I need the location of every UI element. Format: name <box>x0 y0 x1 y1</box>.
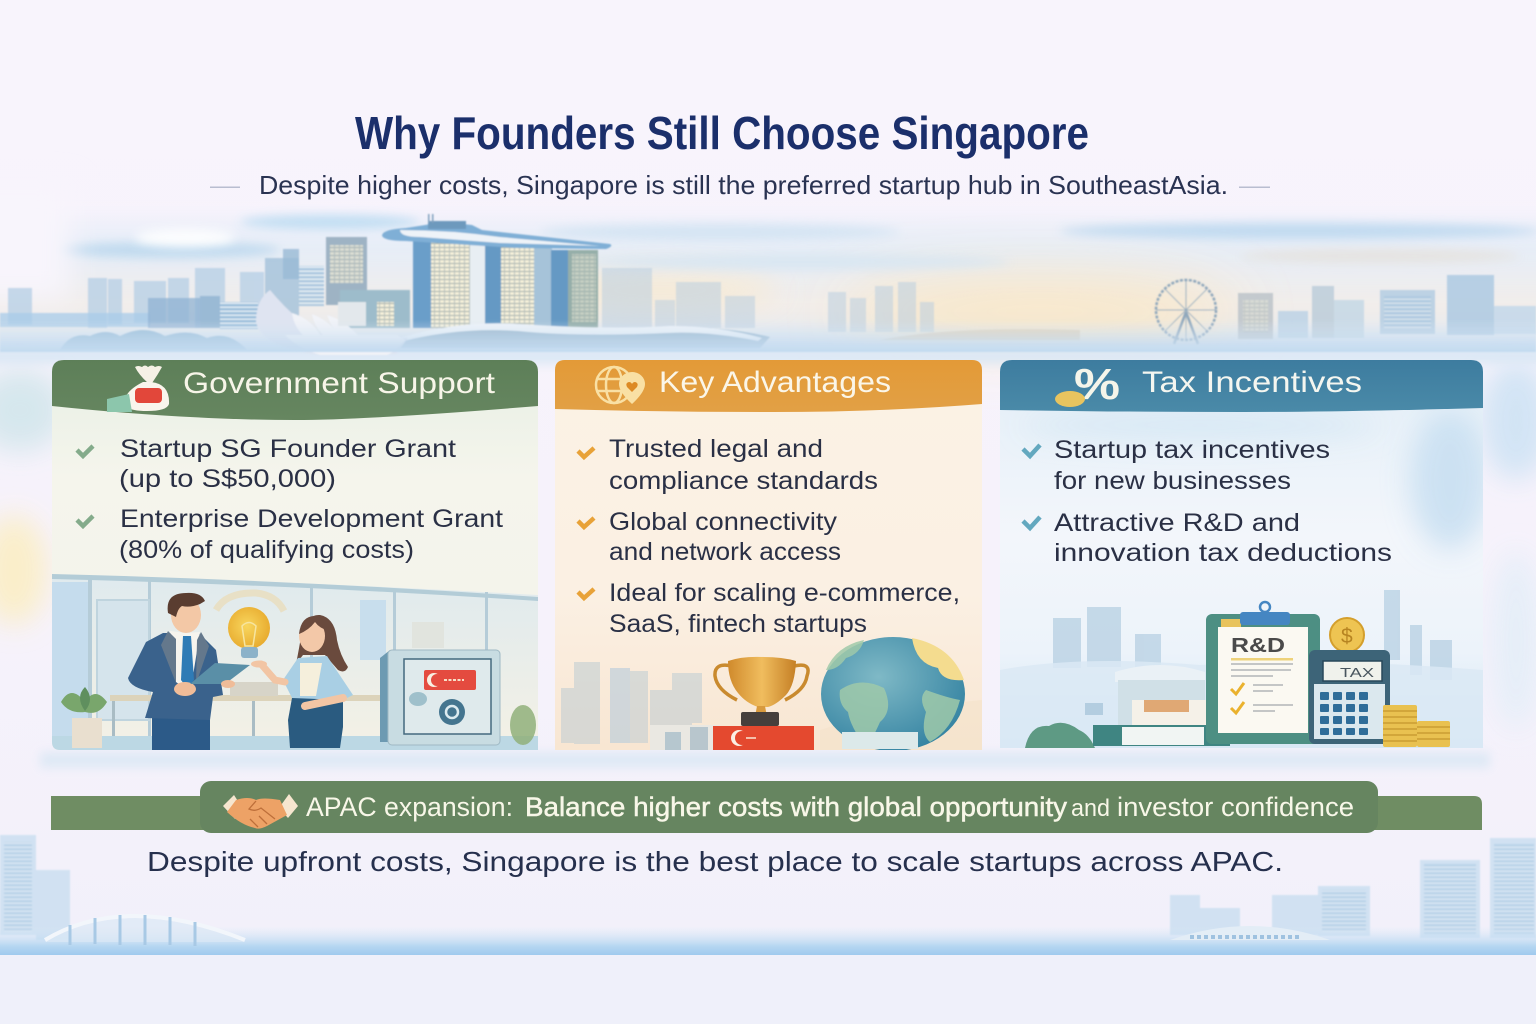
banner: APAC expansion <box>51 781 1482 833</box>
list: Government Support items <box>77 435 503 564</box>
list: Government Support items: Startup SG Founder Grant <box>120 435 456 463</box>
panel: Key Advantages <box>555 360 982 751</box>
panel: Tax Incentives <box>1000 360 1490 750</box>
list: Government Support items: Enterprise Development Grant <box>120 505 503 533</box>
list: Key Advantages items: SaaS, fintech startups <box>609 610 867 638</box>
Singapore Flyer ferris wheel <box>1156 280 1216 344</box>
icon: trophy <box>713 657 814 750</box>
icon: coin stacks <box>1383 705 1450 747</box>
right bridge <box>1170 926 1330 940</box>
list: Key Advantages items: Ideal for scaling e-commerce, <box>609 579 960 607</box>
title: Why Founders Still Choose Singapore <box>355 107 1089 159</box>
icon: dollar coin: $ <box>1341 625 1353 648</box>
banner text: Balance higher costs with global opportunity <box>525 792 1068 822</box>
heading: Key Advantages: Key Advantages <box>659 366 891 399</box>
list: Tax Incentives items: for new businesses <box>1054 467 1291 495</box>
list: Tax Incentives items: Startup tax incentives <box>1054 436 1330 464</box>
icon: lightbulb <box>216 593 284 658</box>
banner text: investor confidence <box>1117 792 1354 822</box>
office window background <box>52 574 538 750</box>
icon: percent sign with coin: % <box>1074 360 1120 409</box>
list: Tax Incentives items <box>1023 436 1392 567</box>
faint city background <box>1000 590 1483 750</box>
illustration: businessman <box>128 593 250 750</box>
faint right buildings <box>602 268 934 332</box>
list: Government Support items: (up to S$50,000) <box>119 465 336 493</box>
list: Key Advantages items: Trusted legal and <box>609 435 823 463</box>
list: Key Advantages items <box>578 435 960 638</box>
list: Government Support items: (80% of qualifying costs) <box>119 536 414 564</box>
skyline: Singapore waterfront <box>0 214 1536 355</box>
banner text <box>306 792 1354 822</box>
panel: Government Support <box>52 360 538 750</box>
icon: R&D clipboard: R&D <box>1231 635 1285 657</box>
icon: money bag <box>107 366 169 412</box>
icon: calculator: TAX <box>1340 665 1374 680</box>
banner text: APAC expansion: <box>306 792 513 822</box>
heading: Tax Incentives: Tax Incentives <box>1142 366 1362 399</box>
heading: Government Support: Government Support <box>183 367 496 400</box>
faint city background <box>561 662 982 750</box>
list: Key Advantages items: Global connectivity <box>609 508 838 536</box>
art science museum and promenade <box>256 290 770 355</box>
icon: calculator <box>1309 650 1390 744</box>
subtitle: Despite higher costs, Singapore is still the preferred startup hub in SoutheastAsia. <box>259 170 1228 200</box>
icon: globe <box>821 637 965 751</box>
conclusion text: Despite upfront costs, Singapore is the best place to scale startups across APAC. <box>147 846 1283 877</box>
left bridge <box>45 915 245 946</box>
icon: stacked boxes <box>1093 700 1230 746</box>
waterline <box>0 320 1536 352</box>
Marina Bay Sands <box>382 214 611 328</box>
icon: percent sign with coin <box>1055 360 1120 409</box>
banner text: and <box>1071 795 1110 822</box>
bayfront trees <box>60 330 247 350</box>
list: Tax Incentives items: innovation tax deductions <box>1054 539 1392 567</box>
illustration: safe with flag <box>380 650 500 745</box>
bottom skyline and water <box>0 835 1536 1024</box>
header: Government Support <box>52 360 538 420</box>
list: Key Advantages items: compliance standards <box>609 467 878 495</box>
buildings right <box>1238 275 1536 339</box>
header: Tax Incentives <box>1000 360 1483 412</box>
icon: handshake <box>223 794 298 829</box>
distant buildings left <box>8 268 264 328</box>
icon: globe with map pin <box>596 367 645 404</box>
list: Key Advantages items: and network access <box>609 538 841 566</box>
header: Key Advantages <box>555 360 982 412</box>
icon: dollar coin <box>1330 618 1364 652</box>
icon: R&D clipboard <box>1206 602 1320 744</box>
mid towers <box>148 237 410 329</box>
illustration: businesswoman <box>251 615 353 748</box>
list: Tax Incentives items: Attractive R&D and <box>1054 509 1300 537</box>
icon: potted plants <box>61 687 536 748</box>
